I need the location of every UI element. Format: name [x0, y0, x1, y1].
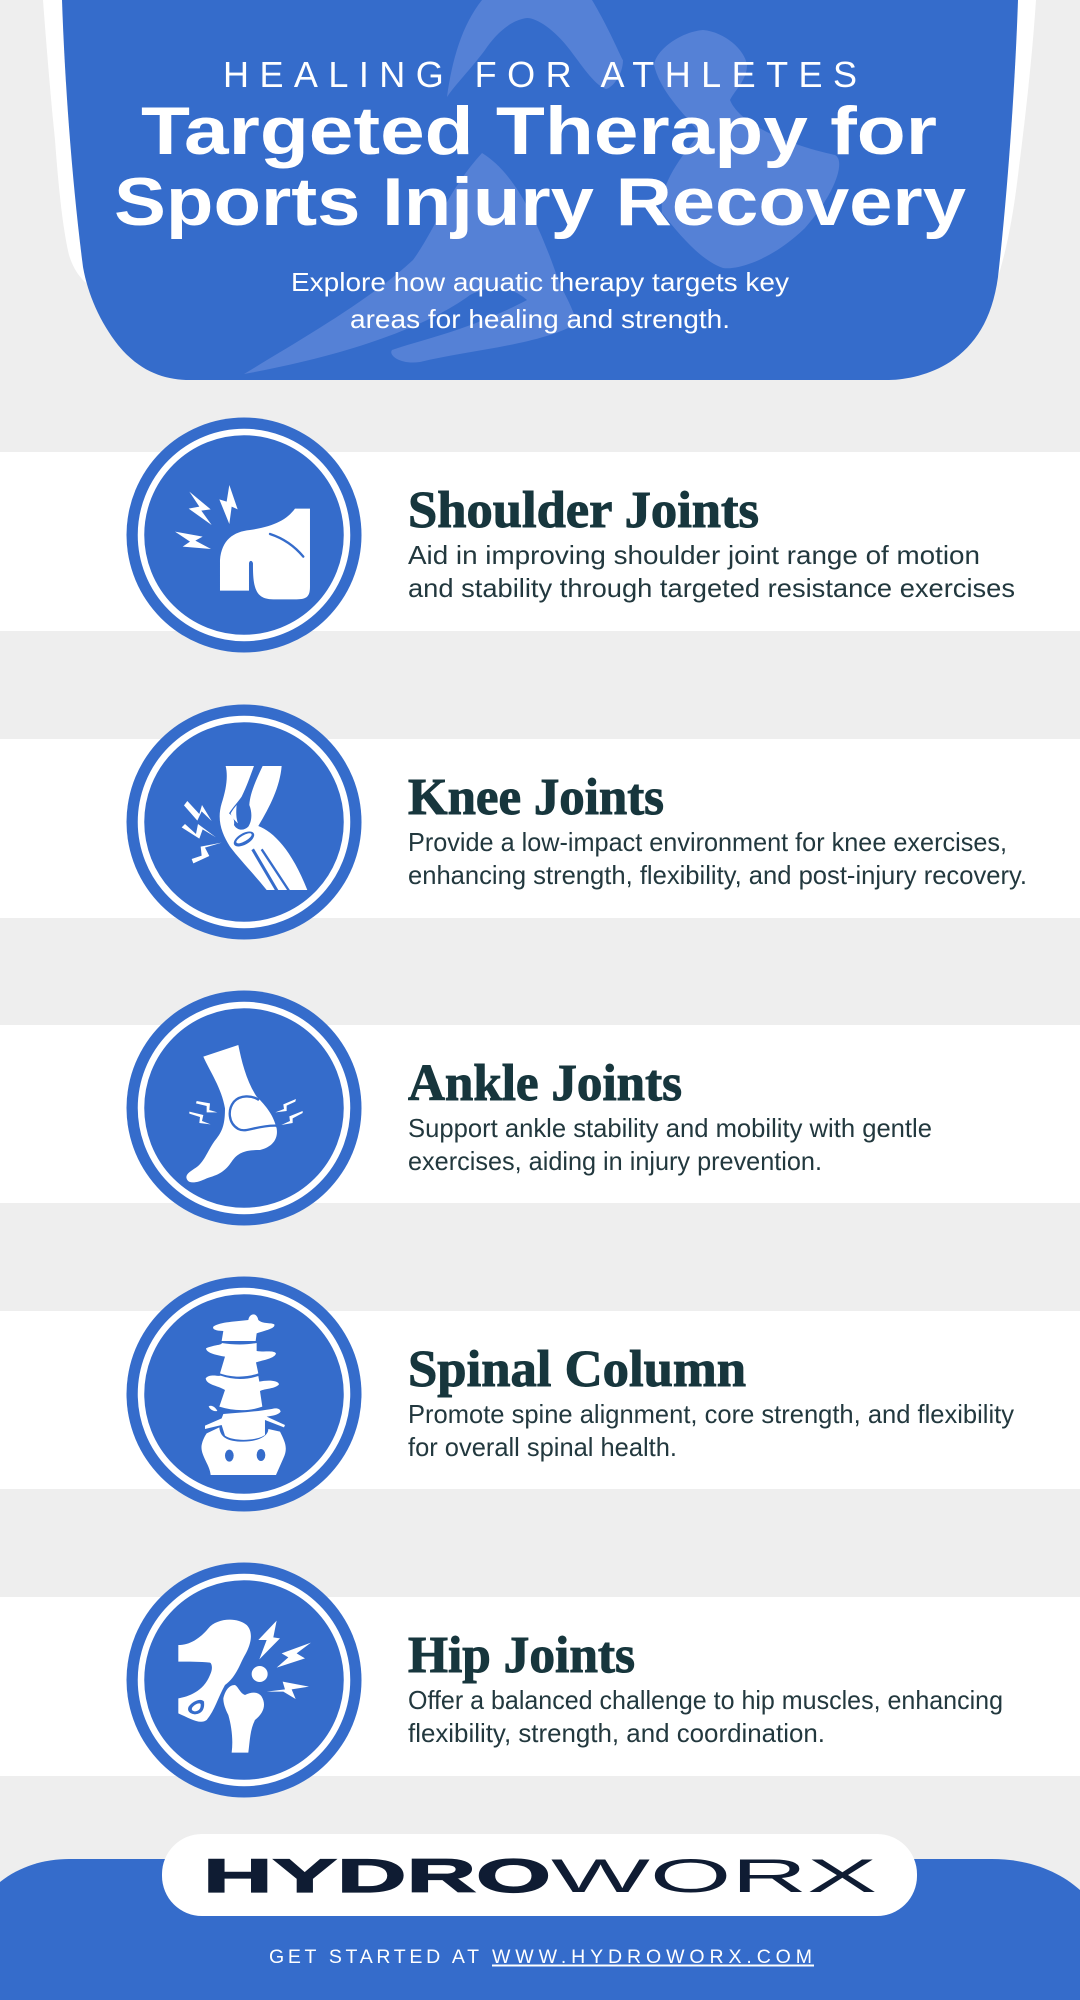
title: [114, 93, 966, 240]
subtitle: areas for healing and strength.: [350, 304, 730, 334]
header white backing shape: [43, 0, 1036, 290]
logo pill: WORX: [551, 1850, 877, 1903]
description: Support ankle stability and mobility with gentle: [408, 1113, 932, 1143]
description: exercises, aiding in injury prevention.: [408, 1146, 822, 1176]
icon: knee: [126, 704, 362, 940]
title: Sports Injury Recovery: [114, 164, 966, 240]
call to action: [269, 1946, 814, 1968]
description: flexibility, strength, and coordination.: [408, 1718, 825, 1748]
panel: footer: [0, 1834, 1080, 2000]
icon: spine: [126, 1276, 362, 1512]
description: Offer a balanced challenge to hip muscles, enhancing: [408, 1685, 1003, 1715]
ghost athlete figure: [244, 0, 839, 374]
panel: ankle joints: [0, 990, 1080, 1226]
panel: shoulder joints: [0, 418, 1080, 652]
panel: knee joints: [0, 704, 1080, 940]
description: [408, 827, 1027, 890]
description: [408, 1113, 932, 1176]
panel: hip joints: [0, 1562, 1080, 1798]
call to action: GET STARTED AT: [269, 1946, 479, 1968]
panel: header: [43, 0, 1036, 380]
call to action: WWW.HYDROWORX.COM: [492, 1946, 812, 1968]
header blue shape: [62, 0, 1018, 380]
description: Aid in improving shoulder joint range of motion: [408, 540, 980, 570]
title: Targeted Therapy for: [141, 93, 937, 169]
description: Provide a low-impact environment for knee exercises,: [408, 827, 1007, 857]
description: and stability through targeted resistance exercises: [408, 573, 1015, 603]
heading: Spinal Column: [408, 1341, 746, 1398]
description: Promote spine alignment, core strength, and flexibility: [408, 1399, 1014, 1429]
heading: Ankle Joints: [408, 1055, 682, 1112]
icon: ankle: [126, 990, 362, 1226]
logo pill: [162, 1834, 917, 1916]
logo pill: HYDRO: [203, 1850, 551, 1903]
footer blue band: [0, 1859, 1080, 2000]
heading: Shoulder Joints: [408, 482, 759, 539]
heading: Hip Joints: [408, 1627, 635, 1684]
kicker: HEALING FOR ATHLETES: [223, 54, 857, 95]
subtitle: [291, 267, 789, 334]
description: [408, 1399, 1014, 1462]
panel: spinal column: [0, 1276, 1080, 1512]
subtitle: Explore how aquatic therapy targets key: [291, 267, 789, 297]
icon: shoulder: [126, 418, 362, 652]
description: [408, 1685, 1003, 1748]
icon: hip: [126, 1562, 362, 1798]
description: for overall spinal health.: [408, 1432, 677, 1462]
heading: Knee Joints: [408, 769, 664, 826]
description: [408, 540, 1015, 603]
description: enhancing strength, flexibility, and post-injury recovery.: [408, 860, 1027, 890]
